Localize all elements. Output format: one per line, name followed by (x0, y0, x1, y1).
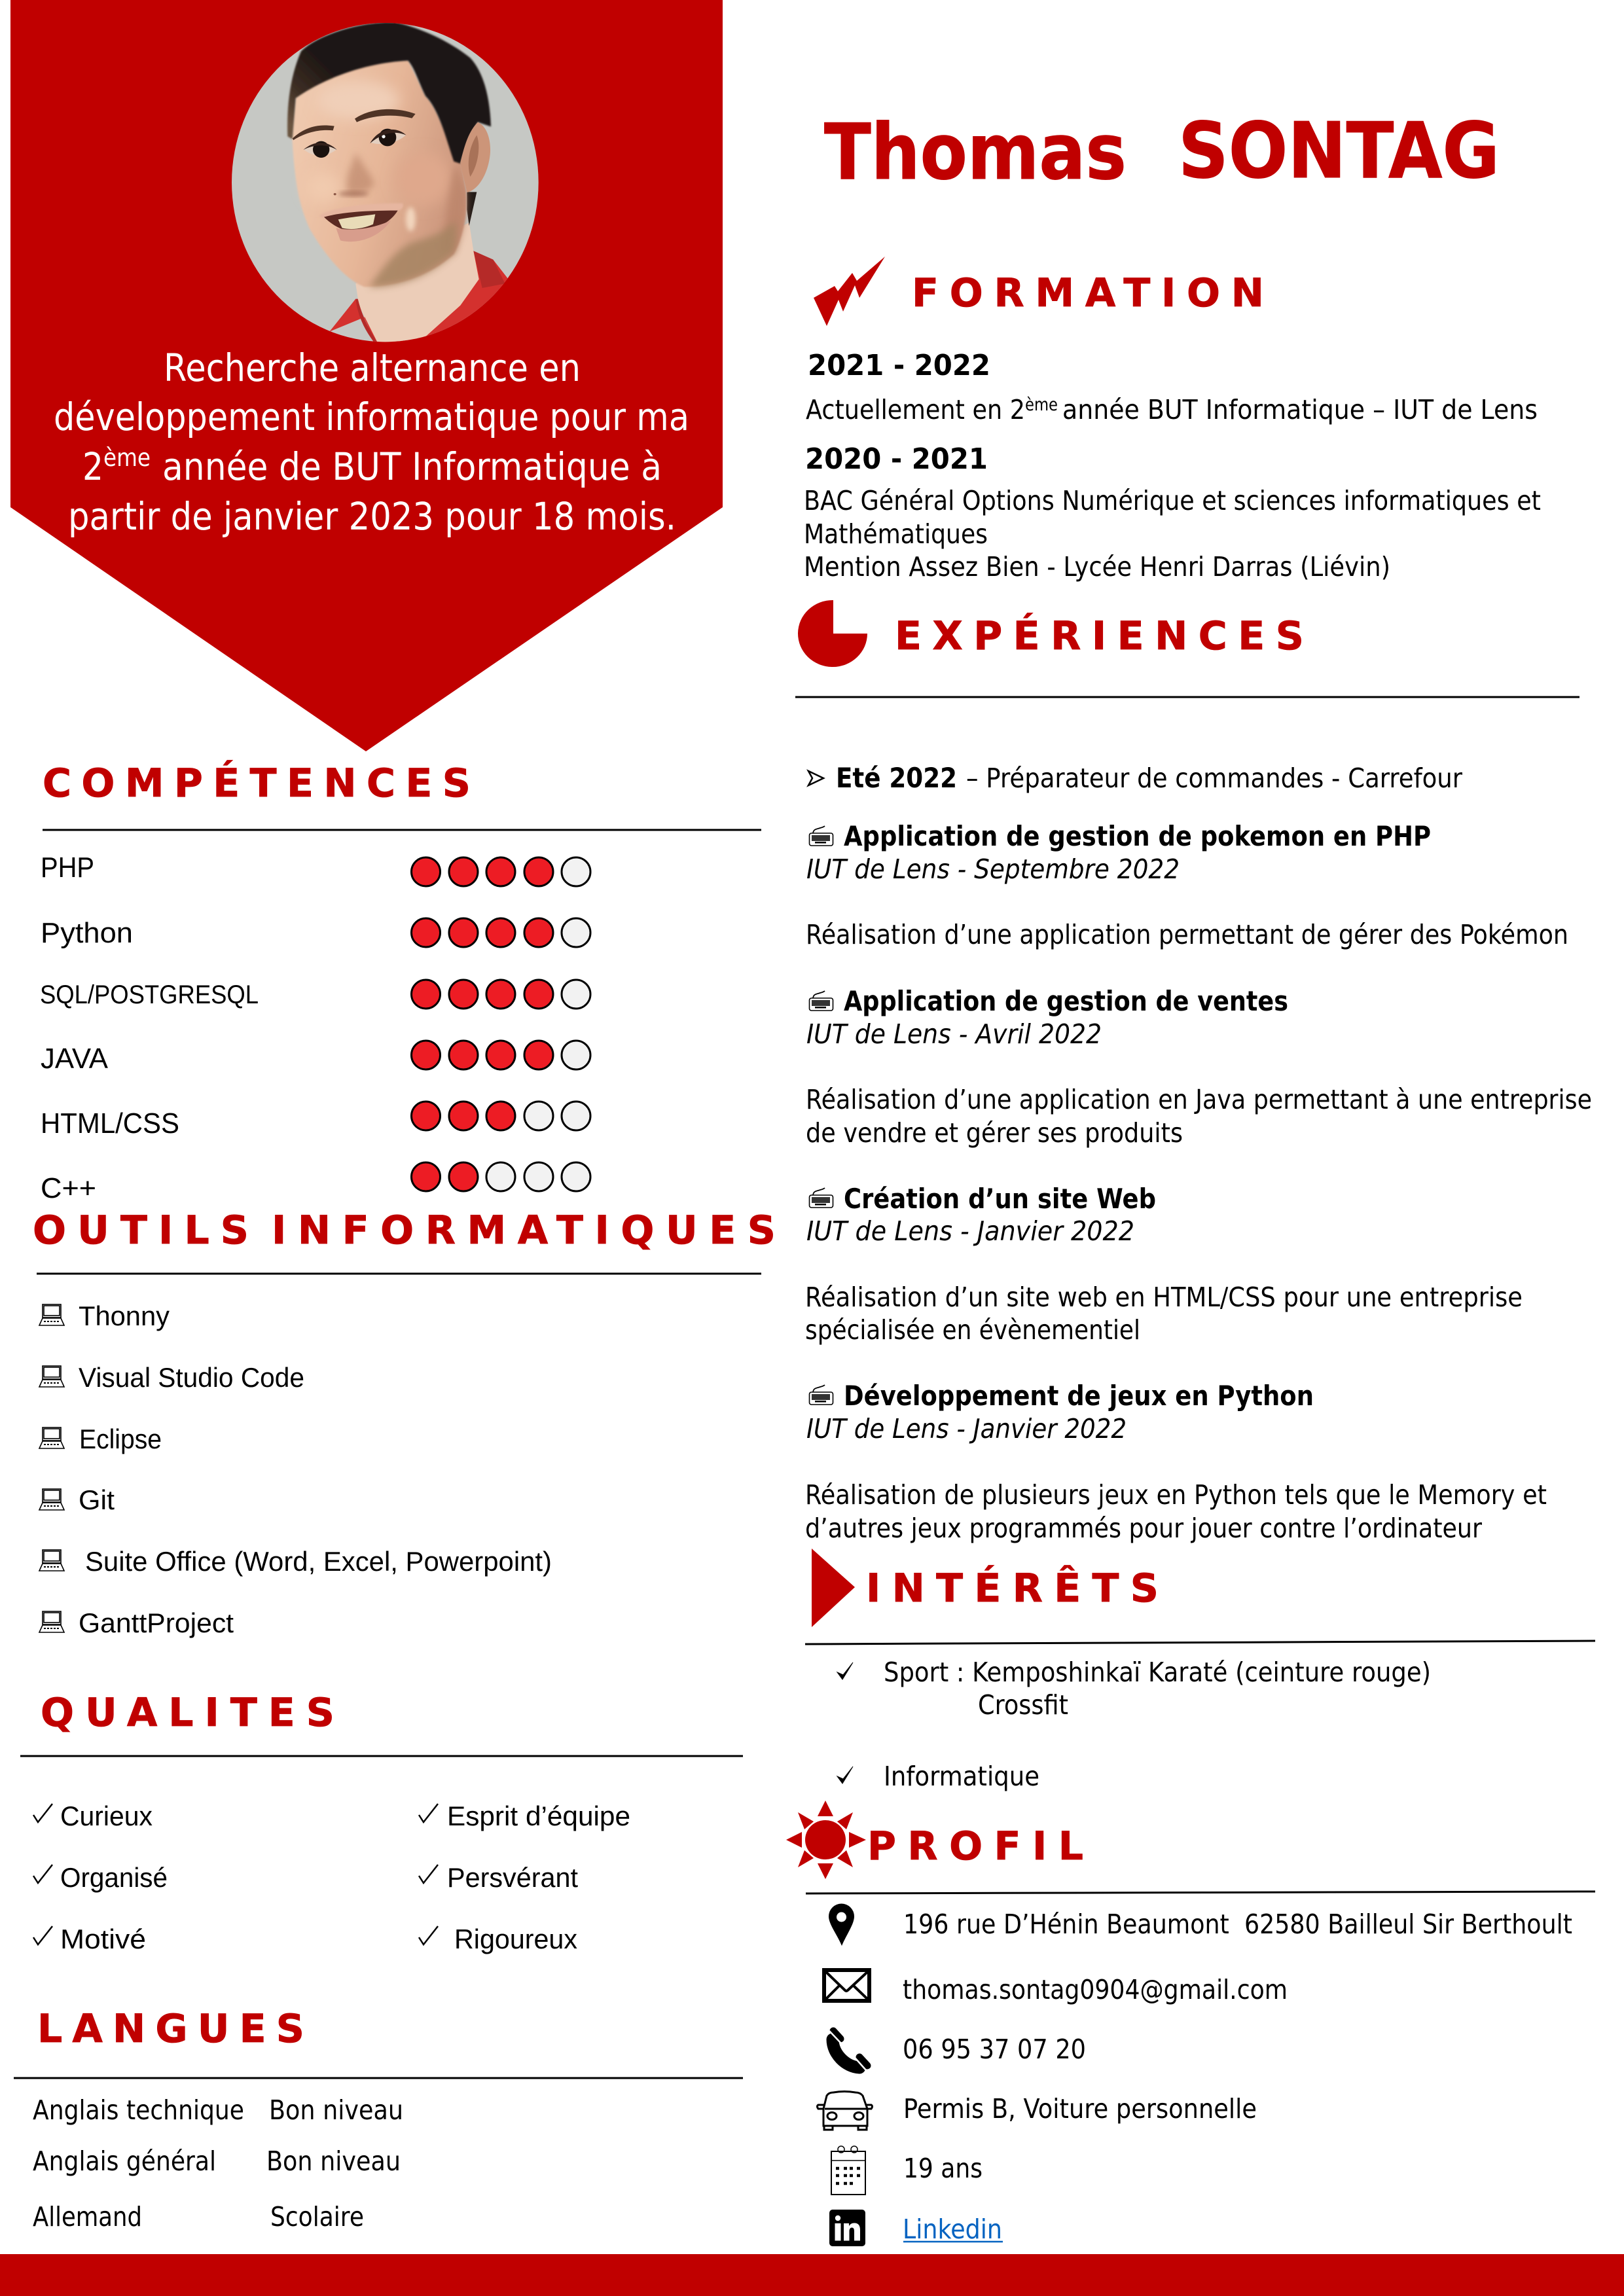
skill: JAVA: JAVA (41, 1043, 109, 1075)
skill: C++: C++ (41, 1172, 96, 1204)
panel: interets (805, 1549, 1595, 1792)
language list: Anglais général (33, 2145, 216, 2177)
banner text: Recherche alternance en (164, 346, 581, 390)
panel: competences (40, 759, 761, 1204)
footer bar (0, 2254, 1624, 2296)
icon: pie (798, 600, 867, 667)
skill: SQL (40, 980, 590, 1009)
banner text: 2 (82, 444, 103, 489)
project: jeux python: d’autres jeux programmés pour jouer contre l’ordinateur (805, 1513, 1482, 1544)
project: ventes (806, 985, 1592, 1149)
contact: age: 19 ans (903, 2153, 983, 2184)
tool: Eclipse: Eclipse (79, 1424, 162, 1454)
quality list: Motivé (60, 1924, 146, 1954)
entry: 2020-2021: 2020 - 2021 (805, 442, 988, 476)
skill: HTML/CSS: HTML/CSS (41, 1107, 179, 1139)
heading: experiences: EXPÉRIENCES (895, 612, 1304, 659)
banner text: ème (103, 444, 151, 472)
panel: experiences (795, 600, 1592, 1544)
heading: formation: FORMATION (912, 270, 1264, 316)
contact: address (829, 1904, 1572, 1946)
entry: 2020-2021: Mention Assez Bien - Lycée Henri Darras (Liévin) (804, 551, 1390, 583)
banner text: développement informatique pour ma (54, 395, 689, 439)
quality list: Organisé (60, 1862, 168, 1893)
skill: PHP: PHP (41, 852, 94, 884)
quality list: Curieux (60, 1801, 153, 1831)
tool: Eclipse (39, 1424, 162, 1454)
quality list: Esprit d’équipe (447, 1801, 630, 1831)
tool: GanttProject: GanttProject (79, 1607, 234, 1638)
title: name: Thomas (824, 107, 1127, 197)
icon: lightning bolt (814, 257, 885, 326)
title: name (824, 105, 1500, 197)
contact: car (817, 2092, 1257, 2130)
contact: phone: 06 95 37 07 20 (903, 2034, 1086, 2065)
language list: Bon niveau (269, 2094, 403, 2126)
project: jeux python: Développement de jeux en Python (844, 1380, 1314, 1412)
job: été 2022: – Préparateur de commandes - Carrefour (966, 762, 1462, 794)
contact: linkedin: Linkedin (903, 2214, 1002, 2245)
skill: HTML/CSS (41, 1102, 590, 1139)
title: name: SONTAG (1178, 105, 1500, 196)
tool: Git: Git (79, 1484, 115, 1515)
entry: 2020-2021: BAC Général Options Numérique et sciences informatiques et (804, 485, 1541, 516)
panel: profil (786, 1801, 1595, 2246)
heading: profil: PROFIL (867, 1823, 1083, 1869)
project: ventes: IUT de Lens - Avril 2022 (806, 1018, 1102, 1050)
heading: outils informatiques: OUTILS (33, 1208, 249, 1253)
contact: linkedin (829, 2210, 1003, 2246)
icon: triangle (812, 1549, 855, 1627)
item: sport (837, 1657, 1431, 1721)
heading: competences: COMPÉTENCES (43, 759, 471, 806)
skill: C++ (41, 1162, 590, 1204)
quality list: Persvérant (447, 1862, 578, 1893)
language list: Scolaire (270, 2201, 364, 2233)
banner text: partir de janvier 2023 pour 18 mois. (68, 494, 676, 539)
language list: Anglais technique (33, 2094, 244, 2126)
project: pokemon: Application de gestion de pokemon en PHP (844, 820, 1431, 852)
tool: Visual Studio Code: Visual Studio Code (79, 1362, 304, 1393)
banner shape (10, 0, 723, 751)
skill: Python: Python (41, 917, 133, 949)
entry: 2021-2022: 2021 - 2022 (808, 349, 990, 382)
project: ventes: Application de gestion de ventes (844, 985, 1288, 1017)
panel: profile banner (10, 0, 723, 751)
quality list (33, 1801, 630, 1954)
project: site web: Création d’un site Web (844, 1183, 1156, 1215)
panel: outils informatiques (33, 1208, 776, 1638)
project: ventes: de vendre et gérer ses produits (806, 1117, 1183, 1149)
contact: email (824, 1970, 1288, 2005)
heading: outils informatiques: INFORMATIQUES (272, 1208, 776, 1253)
skill: SQL: SQL/POSTGRESQL (40, 980, 259, 1009)
contact: email: thomas.sontag0904@gmail.com (903, 1974, 1288, 2005)
entry: 2020-2021 (804, 442, 1541, 583)
contact: car: Permis B, Voiture personnelle (903, 2093, 1257, 2125)
quality list: Rigoureux (454, 1924, 577, 1954)
portrait photo (232, 23, 539, 342)
job: été 2022: Eté 2022 (836, 762, 957, 794)
tool: Suite Office: Suite Office (Word, Excel, Powerpoint) (85, 1546, 552, 1577)
heading: qualites: QUALITES (41, 1690, 334, 1736)
heading: langues: LANGUES (37, 2006, 304, 2052)
panel: qualites (20, 1690, 743, 1954)
skill: PHP (41, 852, 590, 886)
project: site web: Réalisation d’un site web en HTML/CSS pour une entreprise (805, 1282, 1523, 1313)
panel: langues (14, 2006, 743, 2233)
banner text (54, 346, 689, 539)
entry: 2021-2022: Actuellement en 2 (806, 394, 1025, 425)
tool: Thonny (39, 1300, 170, 1331)
project: jeux python: IUT de Lens - Janvier 2022 (806, 1413, 1127, 1444)
project: pokemon: IUT de Lens - Septembre 2022 (806, 853, 1180, 885)
project: site web: spécialisée en évènementiel (805, 1314, 1140, 1346)
icon: sun (786, 1801, 866, 1879)
language list (33, 2094, 403, 2233)
project: jeux python (805, 1380, 1547, 1544)
entry: 2021-2022 (806, 349, 1538, 425)
job: été 2022 (808, 762, 1462, 794)
contact: phone (829, 2031, 1086, 2070)
heading: interets: INTÉRÊTS (866, 1564, 1159, 1611)
item: sport: Crossfit (978, 1689, 1068, 1721)
project: pokemon (806, 820, 1568, 950)
heading: outils informatiques (33, 1208, 776, 1253)
language list: Allemand (33, 2201, 142, 2233)
contact: age (831, 2146, 983, 2195)
skill: Python (41, 917, 590, 949)
entry: 2020-2021: Mathématiques (804, 518, 988, 550)
project: site web (805, 1183, 1523, 1346)
entry: 2021-2022: ème (1025, 395, 1058, 415)
project: jeux python: Réalisation de plusieurs jeux en Python tels que le Memory et (805, 1479, 1547, 1511)
banner text: année de BUT Informatique à (162, 444, 662, 489)
entry: 2021-2022: année BUT Informatique – IUT de Lens (1062, 394, 1538, 425)
tool: Thonny: Thonny (79, 1300, 170, 1331)
language list: Bon niveau (266, 2145, 401, 2177)
panel: formation (804, 257, 1541, 583)
project: site web: IUT de Lens - Janvier 2022 (806, 1215, 1134, 1247)
item: sport: Sport : Kemposhinkaï Karaté (ceinture rouge) (884, 1657, 1431, 1688)
skill: JAVA (41, 1041, 590, 1075)
item: informatique: Informatique (884, 1761, 1039, 1792)
tool: Git (39, 1484, 115, 1515)
